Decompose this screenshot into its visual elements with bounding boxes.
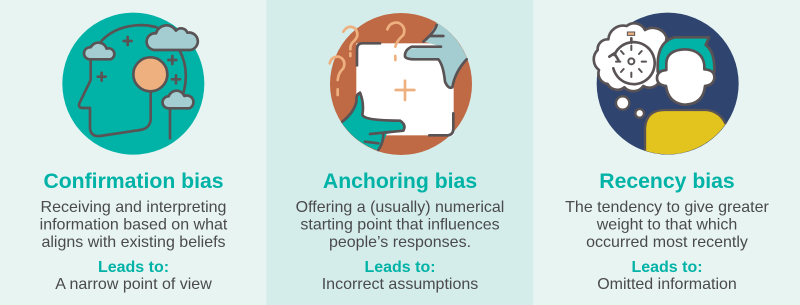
description: confirmation bias: aligns with existing beliefs <box>41 234 226 251</box>
panel: anchoring bias <box>266 0 533 305</box>
heading: recency bias: Recency bias <box>599 170 735 193</box>
heading: anchoring bias: Anchoring bias <box>323 170 477 193</box>
description: anchoring bias: people’s responses. <box>329 234 471 251</box>
panel: confirmation bias <box>0 0 266 305</box>
description: recency bias: weight to that which <box>596 216 737 234</box>
icon: head with clouds <box>62 13 204 155</box>
leads to label: Leads to: <box>364 259 436 276</box>
description: anchoring bias: starting point that influences <box>300 216 500 234</box>
icon: framing hands <box>330 13 472 155</box>
description: confirmation bias: information based on what <box>40 216 228 234</box>
leads to label: Leads to: <box>631 259 703 276</box>
outcome text: Omitted information <box>597 276 737 293</box>
icon: person recalling stopwatch <box>594 13 739 155</box>
description: confirmation bias: Receiving and interpreting <box>41 199 226 216</box>
leads to label: Leads to: <box>98 259 169 276</box>
heading: confirmation bias: Confirmation bias <box>43 170 224 193</box>
description: recency bias: The tendency to give greater <box>565 199 770 216</box>
outcome text: Incorrect assumptions <box>322 276 478 293</box>
outcome text: A narrow point of view <box>55 276 212 293</box>
description: anchoring bias: Offering a (usually) numerical <box>296 199 504 216</box>
description: recency bias: occurred most recently <box>586 234 748 251</box>
panel: recency bias <box>533 0 800 305</box>
